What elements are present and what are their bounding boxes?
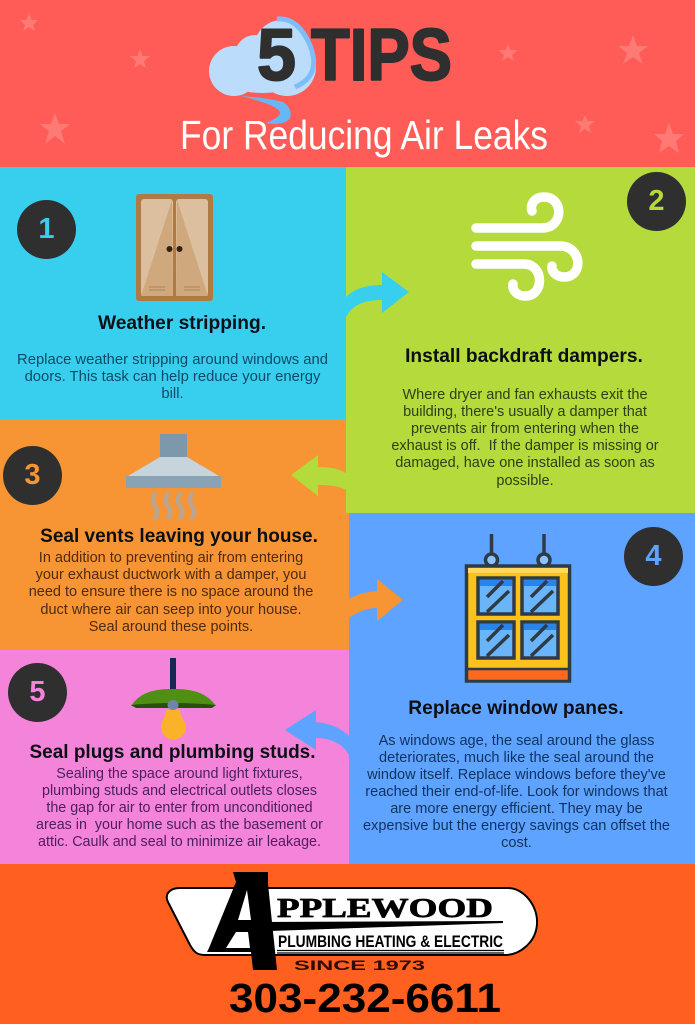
- title: 5 TIPS: 5: [257, 15, 296, 96]
- body text: [36, 766, 323, 850]
- logo badge shape: [167, 888, 537, 955]
- icon: hanging window: [464, 534, 572, 683]
- panel: tip 4 window panes: [349, 513, 695, 864]
- body text: attic. Caulk and seal to minimize air leakage.: [38, 834, 321, 850]
- body text: need to ensure there is no space around the: [29, 584, 313, 600]
- body text: In addition to preventing air from entering: [39, 550, 303, 566]
- logo rule: [250, 921, 503, 931]
- body text: [391, 386, 659, 489]
- icon: wind: [471, 192, 583, 301]
- logo plumbing line: PLUMBING HEATING & ELECTRIC: [278, 933, 503, 951]
- logo wordmark: PPLEWOOD: [277, 893, 493, 923]
- title: 5 TIPS: TIPS: [311, 15, 452, 96]
- body text: are more energy efficient. They may be: [390, 801, 643, 817]
- body text: damaged, have one installed as soon as: [395, 455, 655, 471]
- body text: Seal around these points.: [89, 619, 253, 635]
- body text: reached their end-of-life. Look for windows that: [365, 784, 668, 800]
- panel: tip 3 seal vents: [0, 419, 349, 650]
- body text: exhaust is off. If the damper is missing or: [391, 438, 659, 454]
- number badge 2: [627, 172, 686, 231]
- panel: header: [0, 0, 695, 167]
- number badge 1: [17, 200, 76, 259]
- number badge 4: 4: [645, 540, 662, 572]
- body text: [29, 550, 313, 635]
- body text: prevents air from entering when the: [411, 421, 639, 437]
- logo: Applewood: [166, 872, 538, 1021]
- heading: Seal plugs and plumbing studs.: [29, 742, 316, 763]
- body text: Replace weather stripping around windows and: [17, 352, 328, 368]
- number badge 2: 2: [648, 185, 665, 217]
- body text: bill.: [161, 386, 184, 402]
- icon: range hood: [126, 434, 221, 520]
- arrow: tip 4 to tip 5: [285, 710, 349, 755]
- panel: tip 5 plugs and studs: [0, 650, 349, 864]
- body text: expensive but the energy savings can offset the: [363, 818, 670, 834]
- body text: cost.: [501, 835, 532, 851]
- heading: Seal vents leaving your house.: [40, 526, 318, 547]
- body text: deteriorates, much like the seal around the: [379, 750, 654, 766]
- number badge 3: [3, 446, 62, 505]
- number badge 5: 5: [29, 676, 46, 708]
- body text: Sealing the space around light fixtures,: [56, 766, 303, 782]
- body text: Where dryer and fan exhausts exit the: [402, 386, 648, 402]
- number badge 1: 1: [38, 213, 55, 245]
- logo since: SINCE 1973: [294, 957, 425, 973]
- body text: the gap for air to enter from unconditioned: [46, 800, 313, 816]
- phone number: 303-232-6611: [229, 975, 501, 1021]
- panel: footer: [0, 864, 695, 1024]
- arrow: tip 3 to tip 4: [349, 579, 403, 621]
- icon: pendant lamp: [131, 658, 216, 740]
- body text: building, there's usually a damper that: [403, 404, 647, 420]
- body text: doors. This task can help reduce your energy: [25, 369, 320, 385]
- body text: possible.: [496, 473, 554, 489]
- body text: duct where air can seep into your house.: [40, 602, 302, 618]
- title: 5 TIPS: [257, 15, 452, 96]
- body text: areas in your home such as the basement or: [36, 817, 323, 833]
- arrow: tip 1 to tip 2: [346, 272, 409, 317]
- logo big A: [207, 872, 277, 970]
- body text: your exhaust ductwork with a damper, you: [36, 567, 306, 583]
- body text: As windows age, the seal around the glass: [379, 733, 654, 749]
- heading: Install backdraft dampers.: [405, 346, 643, 367]
- body text: [17, 352, 328, 402]
- panel: tip 1 weather stripping: [0, 167, 346, 419]
- decorative stars: [20, 14, 684, 153]
- heading: Replace window panes.: [408, 698, 624, 719]
- panel: tip 2 backdraft dampers: [346, 167, 695, 513]
- logo underline: [277, 950, 504, 953]
- body text: window itself. Replace windows before they've: [367, 767, 666, 783]
- heading: Weather stripping.: [98, 313, 266, 334]
- body text: [363, 733, 670, 851]
- arrow: tip 2 to tip 3: [291, 455, 346, 496]
- number badge 3: 3: [24, 459, 41, 491]
- number badge 5: [8, 663, 67, 722]
- number badge 4: [624, 527, 683, 586]
- subtitle: For Reducing Air Leaks: [180, 112, 548, 158]
- icon: cloud with wind swirl: [209, 16, 316, 124]
- body text: plumbing studs and electrical outlets closes: [42, 783, 317, 799]
- icon: double door: [136, 194, 213, 301]
